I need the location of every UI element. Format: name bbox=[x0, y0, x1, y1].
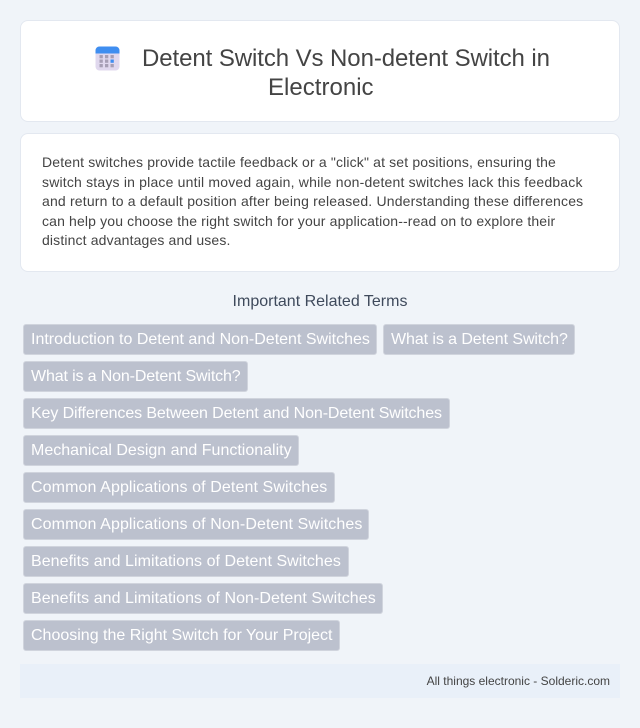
chip: Benefits and Limitations of Non-Detent Switches bbox=[31, 590, 376, 607]
chip bbox=[23, 324, 377, 355]
chip bbox=[23, 361, 248, 392]
chip: Common Applications of Detent Switches bbox=[31, 479, 327, 496]
chip bbox=[23, 435, 299, 466]
chip bbox=[23, 620, 340, 651]
title: Detent Switch Vs Non-detent Switch in bbox=[142, 45, 550, 72]
intro paragraph: and return to a default position after being released. Understanding these differences bbox=[42, 193, 583, 209]
chip: Mechanical Design and Functionality bbox=[31, 442, 292, 459]
chip: What is a Detent Switch? bbox=[391, 331, 568, 348]
title: Electronic bbox=[268, 74, 374, 101]
heading: important related terms: Important Related Terms bbox=[233, 293, 407, 310]
intro paragraph: switch stays in place until moved again, while non-detent switches lack this feedback bbox=[42, 174, 583, 190]
intro paragraph: can help you choose the right switch for your application--read on to explore their bbox=[42, 213, 555, 229]
intro paragraph: Detent switches provide tactile feedback or a "click" at set positions, ensuring the bbox=[42, 154, 556, 170]
chip bbox=[23, 509, 369, 540]
icon: calendar grid bbox=[96, 46, 120, 70]
chip bbox=[383, 324, 575, 355]
panel: intro text bbox=[20, 133, 620, 272]
chip: Key Differences Between Detent and Non-Detent Switches bbox=[31, 405, 442, 422]
intro paragraph bbox=[42, 154, 583, 248]
chip: Benefits and Limitations of Detent Switches bbox=[31, 553, 341, 570]
chip: Choosing the Right Switch for Your Project bbox=[31, 627, 332, 644]
footer credit: All things electronic - Solderic.com bbox=[427, 674, 610, 688]
chip bbox=[23, 546, 349, 577]
chip: Common Applications of Non-Detent Switches bbox=[31, 516, 362, 533]
chip bbox=[23, 583, 383, 614]
chip: Introduction to Detent and Non-Detent Switches bbox=[31, 331, 370, 348]
title bbox=[142, 45, 550, 101]
intro paragraph: distinct advantages and uses. bbox=[42, 232, 231, 248]
footer bar bbox=[20, 664, 620, 698]
chip bbox=[23, 398, 450, 429]
chip: What is a Non-Detent Switch? bbox=[31, 368, 241, 385]
chip bbox=[23, 472, 335, 503]
panel: title card bbox=[20, 20, 620, 122]
